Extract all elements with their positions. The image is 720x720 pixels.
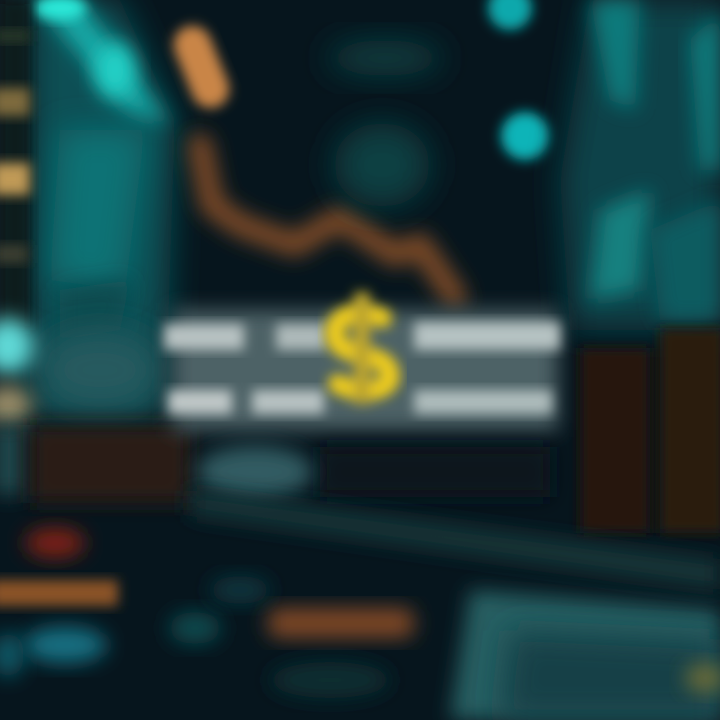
teal blob bottom left (0, 627, 107, 677)
panel: left edge column with stripes (0, 0, 34, 495)
orange bar middle (268, 608, 414, 638)
panel: dark brown block left (30, 425, 190, 503)
icon: red blob (25, 528, 85, 558)
icon: faint teal circle (334, 123, 430, 207)
orange bar left (0, 580, 118, 606)
faint teal heading blur (327, 40, 443, 76)
chart: falling brown line (200, 145, 455, 297)
teal blobs bottom middle (169, 576, 390, 698)
panel: right teal tower (560, 0, 720, 330)
icon: cyan dot middle (501, 112, 549, 160)
panel: bottom right teal card (450, 590, 720, 720)
icon: orange pill (168, 20, 235, 114)
panel: left teal tower (30, 0, 175, 420)
panel: central text banner (164, 310, 560, 430)
icon: yellow dollar sign (334, 292, 390, 404)
panel: dark band under banner (320, 447, 550, 497)
diagonal teal stripe (190, 490, 720, 590)
teal blob under banner (197, 446, 313, 498)
icon: cyan dot top (488, 0, 532, 30)
panel: right dark brown columns (580, 328, 720, 533)
